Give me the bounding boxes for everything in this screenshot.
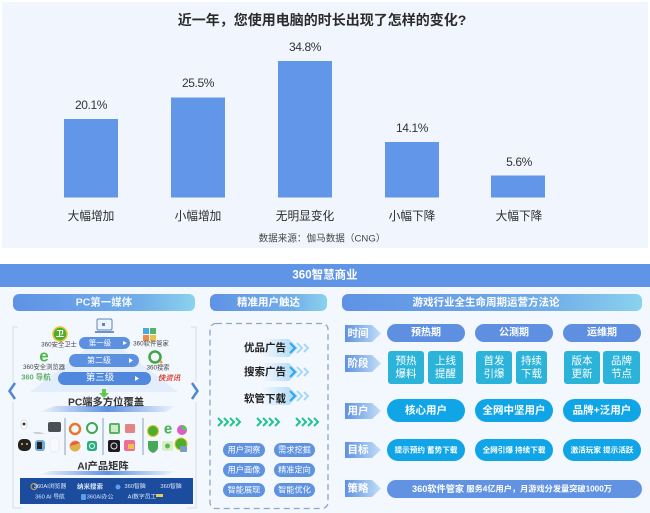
icon: laptop <box>95 319 114 332</box>
bar chart: 大幅下降 <box>496 209 543 223</box>
row: stage <box>388 351 640 384</box>
app icons <box>70 420 187 453</box>
row: stage: 持续 <box>521 354 542 367</box>
row labels: 阶段 <box>348 356 369 370</box>
row: goals: 激活玩家 提示活跃 <box>571 444 634 454</box>
heading: methodology: 游戏行业全生命周期运营方法论 <box>412 296 560 308</box>
ad type arrows: 软管下载 <box>244 392 286 405</box>
heading: PC first media: PC第一媒体 <box>76 296 133 308</box>
panel: precise user reach <box>210 294 328 508</box>
panel: PC first media <box>10 294 198 508</box>
AI product banner: 360AI办公 <box>87 492 114 500</box>
product labels: 360安全卫士 <box>41 340 77 348</box>
row: users: 品牌+泛用户 <box>573 404 631 416</box>
row: users: 全网中坚用户 <box>482 404 546 416</box>
row labels: 目标 <box>348 443 369 456</box>
row: time: 公测期 <box>499 326 529 338</box>
capability chips: 用户画像 <box>228 464 260 474</box>
AI product banner: AI数字员工 <box>128 492 157 500</box>
bar chart: 34.8% <box>289 40 322 54</box>
bar chart: 14.1% <box>396 121 429 135</box>
decorative swoosh <box>38 406 177 412</box>
device icons <box>18 420 61 452</box>
panel: lower background <box>0 264 650 513</box>
row: goals: 全网引爆 持续下载 <box>483 444 546 454</box>
product labels: 360搜索 <box>146 362 170 372</box>
bar chart: 5.6% <box>506 155 533 169</box>
heading: PC first media <box>13 294 195 311</box>
row labels <box>345 325 381 497</box>
capability chips <box>223 443 315 497</box>
dashed frame <box>210 324 328 508</box>
icon: 360 safe guard <box>53 327 67 341</box>
row: time: 预热期 <box>411 326 441 338</box>
row: strategy <box>387 480 642 498</box>
row: stage: 预热 <box>396 354 417 367</box>
pyramid levels: 第二级 <box>87 355 111 365</box>
right chevron <box>192 383 198 399</box>
row: goals: 提示预约 蓄势下载 <box>395 444 458 454</box>
ad type arrows <box>244 339 308 405</box>
row: stage: 爆料 <box>396 367 417 380</box>
heading: PC coverage: PC端多方位覆盖 <box>68 396 144 408</box>
row: strategy: 360软件管家 服务4亿用户，月游戏分发量突破1000万 <box>412 483 612 494</box>
row: stage: 品牌 <box>611 354 632 367</box>
ad type arrows: 搜索广告 <box>244 365 286 378</box>
bar chart: 小幅增加 <box>175 209 221 223</box>
heading: precise reach: 精准用户触达 <box>237 296 300 308</box>
pyramid backdrop <box>30 335 178 392</box>
app icons: e <box>164 420 172 438</box>
icon: 360 search <box>150 352 162 364</box>
kuai news logo: 快资讯 <box>158 374 181 382</box>
row: time <box>387 324 641 342</box>
row: stage: 更新 <box>572 367 593 380</box>
row labels: 策略 <box>348 482 369 494</box>
row: stage: 节点 <box>611 368 632 380</box>
360 navigation logo: 360 导航 <box>21 372 51 382</box>
AI product banner: 360智脑 <box>124 482 146 490</box>
row: stage: 版本 <box>572 354 593 367</box>
left chevron <box>10 383 15 399</box>
icon: 360 safe guard: 卫 <box>56 330 64 338</box>
AI product banner: 360智脑 <box>160 482 182 490</box>
ad type arrows: 优品广告 <box>244 341 286 354</box>
icon: green down arrow <box>99 389 109 398</box>
product labels <box>23 338 170 372</box>
icon: browser e: e <box>39 346 49 366</box>
banner: 360 smart business: 360智慧商业 <box>292 268 358 282</box>
icon: software manager <box>143 328 156 341</box>
bar chart: 大幅增加 <box>68 209 114 223</box>
row labels: 用户 <box>348 404 368 417</box>
banner: 360 smart business <box>0 264 650 287</box>
AI product banner <box>20 478 193 504</box>
chart title: 近一年，您使用电脑的时长出现了怎样的变化? <box>178 12 466 28</box>
product labels: 360安全浏览器 <box>23 362 66 371</box>
dividers <box>65 418 143 455</box>
panel: survey chart <box>2 2 648 248</box>
heading: AI matrix: AI产品矩阵 <box>77 460 129 472</box>
bar chart: 小幅下降 <box>389 209 436 223</box>
row: users: 核心用户 <box>405 404 447 416</box>
row: goals <box>387 439 641 461</box>
data source note: 数据来源：伽马数据（CNG） <box>259 232 385 244</box>
row: users <box>387 399 641 422</box>
panel: game lifecycle methodology <box>342 294 642 498</box>
heading: precise reach <box>210 294 327 311</box>
heading: methodology <box>342 294 642 311</box>
capability chips: 需求挖掘 <box>278 444 311 454</box>
bar chart: 25.5% <box>182 76 215 90</box>
bar chart: 20.1% <box>75 98 108 112</box>
capability chips: 智能优化 <box>278 484 311 494</box>
pyramid levels: 第三级 <box>86 372 115 384</box>
bar chart <box>64 40 545 223</box>
row: stage: 提醒 <box>435 368 456 380</box>
row: stage: 首发 <box>484 354 505 367</box>
decorative swoosh <box>38 471 177 475</box>
row: stage: 引爆 <box>484 367 505 380</box>
row: stage: 上线 <box>435 354 456 367</box>
row labels: 时间 <box>348 326 368 340</box>
green chevrons <box>218 418 318 426</box>
row: stage: 下载 <box>521 368 542 380</box>
bar chart: 无明显变化 <box>276 209 335 223</box>
capability chips: 精准定向 <box>278 464 311 474</box>
AI product banner: 360 AI 导航 <box>35 492 65 500</box>
AI product banner: 360AI浏览器 <box>34 482 66 490</box>
pyramid levels <box>58 337 151 385</box>
row: time: 运维期 <box>587 326 617 338</box>
capability chips: 用户洞察 <box>228 444 260 454</box>
pyramid levels: 第一级 <box>89 338 112 348</box>
AI product banner: 纳米搜索 <box>77 482 104 490</box>
product labels: 360软件管家 <box>133 338 170 348</box>
frame brackets <box>13 327 196 508</box>
capability chips: 智能展现 <box>228 484 260 494</box>
